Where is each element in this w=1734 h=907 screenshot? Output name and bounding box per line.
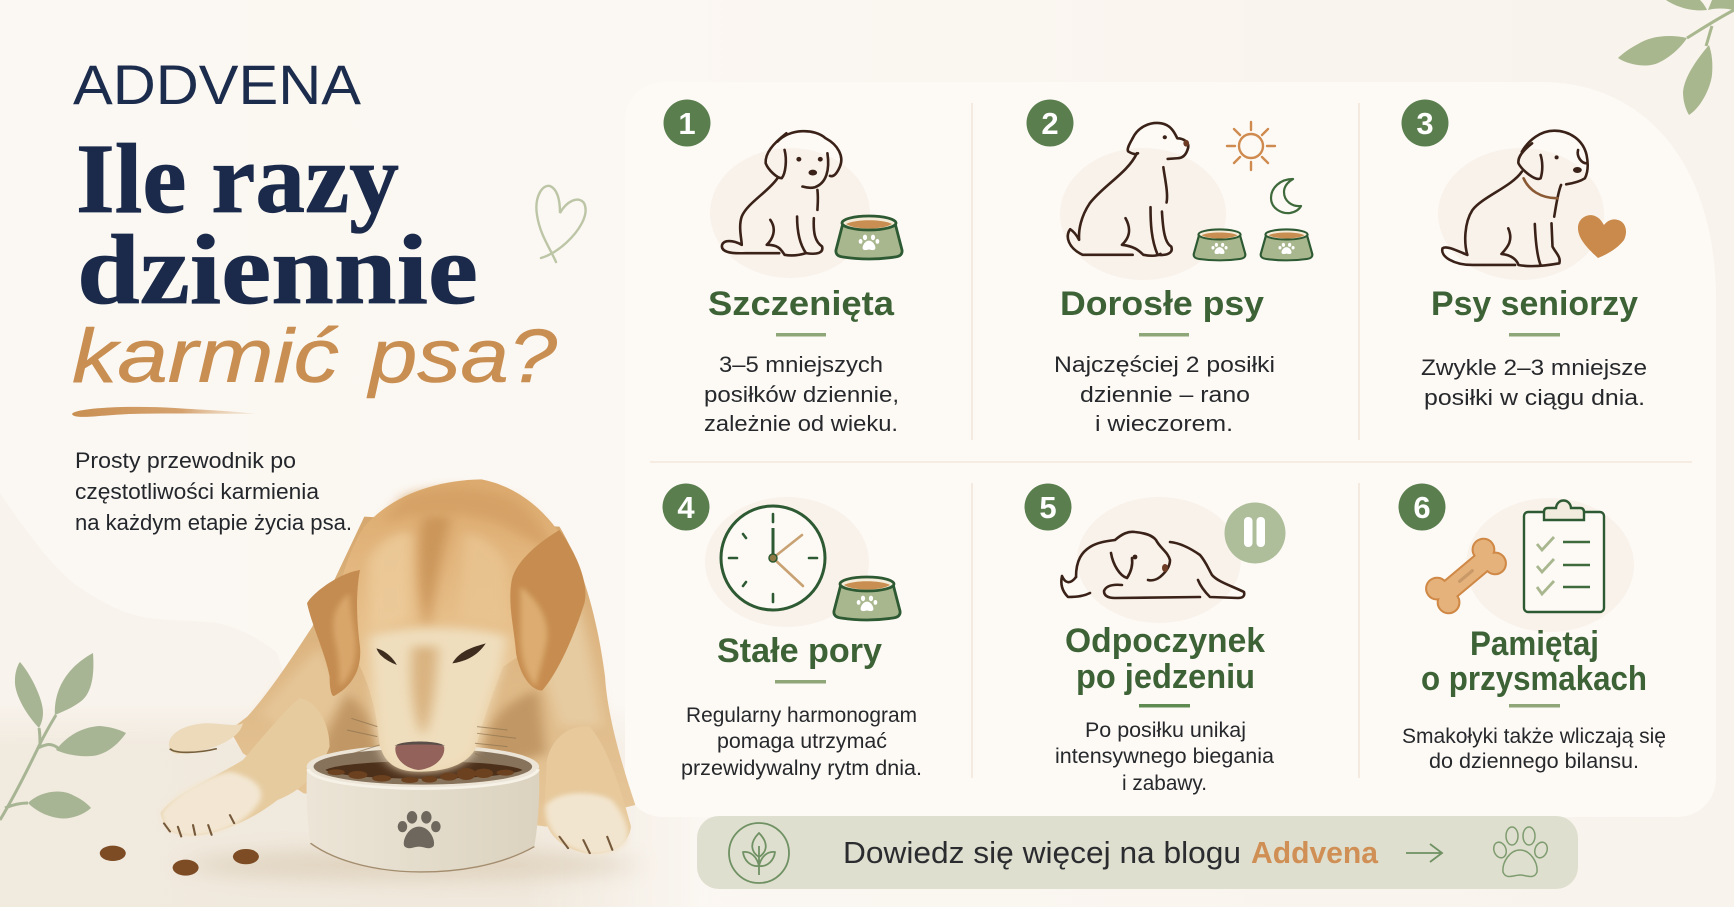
badge 6 [1398, 484, 1446, 530]
icon: heart [1578, 215, 1626, 258]
panel: card 6 Pamiętaj o przysmakach [1398, 484, 1666, 773]
title: psa? [367, 314, 558, 399]
description: posiłków dziennie, [704, 382, 899, 407]
dividers [650, 103, 1692, 778]
kibble in bowl [327, 768, 514, 783]
icon: bowl evening [1261, 229, 1312, 260]
icon: puppy [722, 131, 841, 256]
title [72, 123, 558, 399]
description [1054, 352, 1275, 436]
heading: Dorosłe psy [1060, 285, 1264, 323]
heading: o przysmakach [1421, 660, 1647, 698]
rear paw [169, 723, 243, 754]
nose [395, 743, 444, 770]
icon: adult dog [1068, 123, 1189, 256]
icon: leaf branch left [0, 653, 126, 820]
icon: moon [1271, 179, 1301, 213]
dog head [307, 479, 585, 772]
heading [1065, 622, 1265, 696]
panel: card 2 Dorosłe psy [1026, 100, 1312, 436]
icon backdrop [710, 148, 870, 278]
panel: card 1 Szczenięta [664, 100, 902, 436]
badge 1: 1 [678, 106, 696, 141]
icon: clock [721, 506, 825, 610]
badge 4 [662, 484, 710, 530]
icon: plant in circle [729, 823, 789, 883]
dog body [230, 517, 635, 827]
underline [776, 333, 826, 336]
underline [1509, 704, 1560, 708]
badge 5 [1024, 484, 1072, 530]
badge 6: 6 [1413, 490, 1431, 525]
description: Po posiłku unikaj [1085, 718, 1246, 742]
heading: Szczenięta [708, 285, 895, 323]
subtitle [75, 448, 352, 535]
call to action bar [697, 816, 1578, 889]
right ear [510, 530, 585, 691]
panel: card 3 Psy seniorzy [1402, 100, 1647, 410]
icon: bone [1423, 536, 1509, 616]
title: karmić [72, 314, 339, 399]
icon: sun [1227, 122, 1275, 170]
icon backdrop [705, 497, 869, 627]
eyes [376, 648, 397, 665]
badge 5: 5 [1039, 490, 1057, 525]
subtitle: częstotliwości karmienia [75, 479, 320, 504]
icon backdrop [1060, 148, 1226, 280]
underline [1139, 704, 1190, 708]
underline [775, 680, 826, 684]
icon: paw outline [1492, 827, 1549, 877]
heading: po jedzeniu [1076, 658, 1255, 696]
badge 1 [664, 100, 710, 146]
description: dziennie – rano [1080, 382, 1250, 407]
description: Regularny harmonogram [686, 703, 917, 727]
bowl paw print [398, 811, 441, 848]
description: i zabawy. [1122, 771, 1207, 795]
title: Ile razy [76, 123, 399, 234]
icon: bowl [836, 216, 902, 259]
description: intensywnego biegania [1055, 744, 1274, 768]
call to action text: Dowiedz się więcej na blogu [843, 835, 1241, 870]
description: 3–5 mniejszych [719, 352, 883, 377]
title underline swoosh [72, 407, 256, 417]
icon: resting dog [1061, 532, 1244, 598]
description [704, 352, 899, 436]
icon: pause [1224, 502, 1286, 564]
description: Najczęściej 2 posiłki [1054, 352, 1275, 377]
left ear [307, 570, 360, 696]
panel: cards background [625, 82, 1716, 817]
chest shadow [317, 690, 546, 777]
icon: hand-drawn heart [536, 186, 586, 262]
description [1402, 724, 1666, 773]
heading: Pamiętaj [1470, 625, 1599, 663]
right front leg [544, 726, 631, 854]
photo: dog eating from a bowl [100, 479, 638, 880]
panel: card 5 Odpoczynek po jedzeniu [1024, 484, 1286, 795]
description: posiłki w ciągu dnia. [1424, 385, 1645, 410]
description [1421, 355, 1647, 410]
arrow [1406, 844, 1442, 862]
description: i wieczorem. [1095, 411, 1233, 436]
icon backdrop [1438, 148, 1604, 280]
icon backdrop [1466, 498, 1634, 632]
background wave [0, 493, 360, 907]
heading: Stałe pory [717, 632, 882, 670]
heading: Odpoczynek [1065, 622, 1265, 660]
icon: bowl morning [1194, 229, 1245, 260]
icon: leaf branch top right [1618, 0, 1734, 115]
title: dziennie [77, 214, 478, 325]
bowl interior [307, 745, 539, 789]
icon: clipboard [1524, 500, 1604, 612]
heading [1421, 625, 1647, 698]
badge 3: 3 [1416, 106, 1434, 141]
whiskers [347, 718, 516, 763]
description: pomaga utrzymać [717, 729, 887, 753]
icon: bowl [834, 577, 900, 620]
icon backdrop [1077, 497, 1241, 623]
badge 2 [1026, 100, 1074, 146]
description [681, 703, 922, 780]
logo: ADDVENA [73, 53, 362, 116]
panel: card 4 Stałe pory [662, 484, 922, 780]
icon: senior dog [1442, 131, 1588, 266]
floor [0, 729, 640, 907]
left front leg [160, 698, 330, 836]
subtitle: na każdym etapie życia psa. [75, 510, 352, 535]
kibbles on floor [100, 846, 259, 876]
description: przewidywalny rytm dnia. [681, 756, 922, 780]
bowl front wall [307, 768, 539, 872]
description: do dziennego bilansu. [1429, 749, 1639, 773]
call to action text: Addvena [1251, 835, 1379, 870]
description: Zwykle 2–3 mniejsze [1421, 355, 1647, 380]
brow and muzzle highlights [369, 628, 507, 772]
badge 4: 4 [677, 490, 695, 525]
underline [1139, 333, 1189, 336]
heading: Psy seniorzy [1431, 285, 1638, 323]
badge 2: 2 [1041, 106, 1059, 141]
skull and muzzle [334, 479, 580, 772]
badge 3 [1402, 100, 1448, 146]
underline [1509, 333, 1560, 336]
description [1055, 718, 1274, 795]
subtitle: Prosty przewodnik po [75, 448, 296, 473]
description: Smakołyki także wliczają się [1402, 724, 1666, 748]
description: zależnie od wieku. [704, 411, 898, 436]
